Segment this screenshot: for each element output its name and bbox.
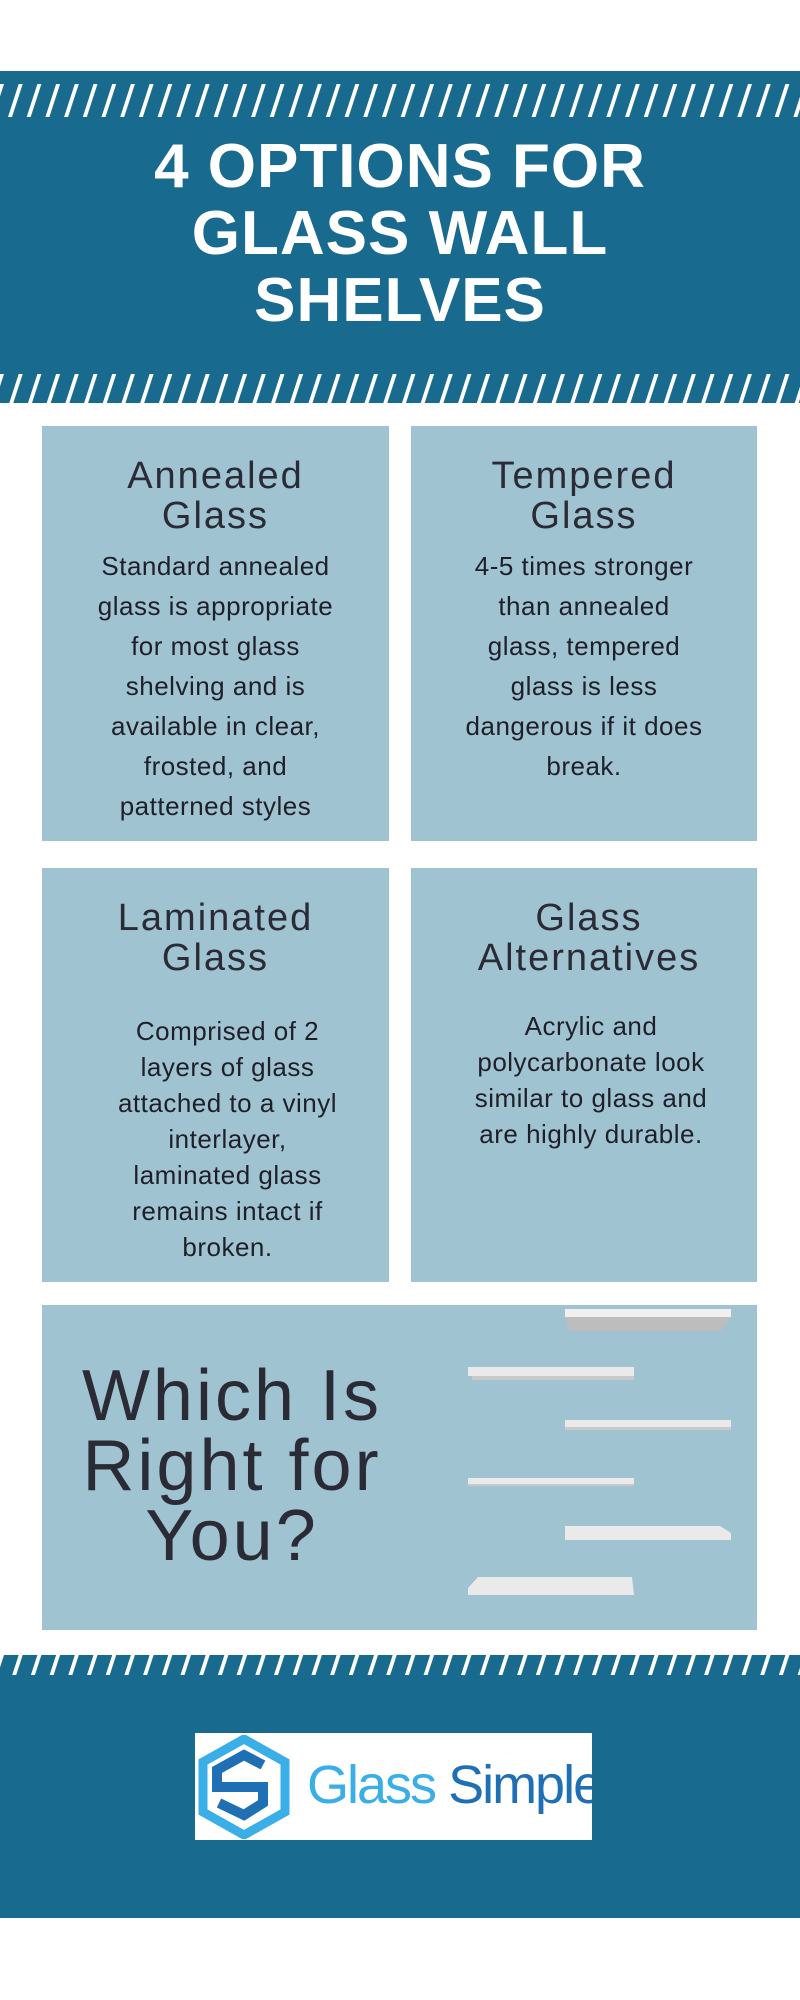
text: available in clear, [111,711,320,741]
text [98,551,333,821]
text: polycarbonate look [477,1047,705,1077]
heading: Right for [82,1426,382,1506]
heading: Alternatives [478,937,700,979]
text: layers of glass [141,1052,314,1082]
heading: Glass [530,495,638,537]
panel: which is right for you [42,1305,757,1630]
logo: Glass Simple [195,1733,592,1840]
heading: Laminated [118,897,313,939]
text [118,1016,337,1262]
heading [82,1356,382,1576]
text: dangerous if it does [466,711,702,741]
stripes bottom [0,374,800,403]
text: for most glass [131,631,300,661]
text: are highly durable. [479,1119,703,1149]
heading [492,455,676,537]
text [475,1011,707,1149]
text: patterned styles [120,791,311,821]
title [154,132,646,335]
text [466,551,702,781]
text: break. [546,751,622,781]
title: GLASS WALL [192,199,608,268]
text: glass is less [511,671,657,701]
text: broken. [182,1232,273,1262]
heading: Glass [162,937,269,979]
text: 4-5 times stronger [475,551,693,581]
panel: tempered glass [411,426,757,841]
title: 4 OPTIONS FOR [154,132,646,201]
heading: Glass [535,897,643,939]
text: than annealed [498,591,670,621]
panel: glass alternatives [411,868,757,1282]
stripes top [0,84,800,117]
text: frosted, and [144,751,287,781]
heading: You? [145,1496,319,1576]
panel: laminated glass [42,868,389,1282]
icon: hexagon S [198,1735,290,1839]
header band [0,71,800,403]
text: Acrylic and [525,1011,657,1041]
heading [478,897,700,979]
text: shelving and is [126,671,305,701]
text: Comprised of 2 [136,1016,319,1046]
heading [127,455,304,537]
text: attached to a vinyl [118,1088,337,1118]
illustration: floating shelves [468,1309,731,1595]
heading: Tempered [492,455,676,497]
footer band [0,1655,800,1918]
heading: Which Is [82,1356,382,1436]
panel: annealed glass [42,426,389,841]
text: interlayer, [168,1124,287,1154]
title: SHELVES [254,266,546,335]
text: Standard annealed [101,551,330,581]
heading: Glass [162,495,269,537]
text: glass, tempered [488,631,680,661]
text: glass is appropriate [98,591,333,621]
stripes [0,1655,800,1675]
text: similar to glass and [475,1083,707,1113]
heading: Annealed [127,455,304,497]
text: laminated glass [133,1160,322,1190]
text: remains intact if [132,1196,323,1226]
heading [118,897,313,979]
